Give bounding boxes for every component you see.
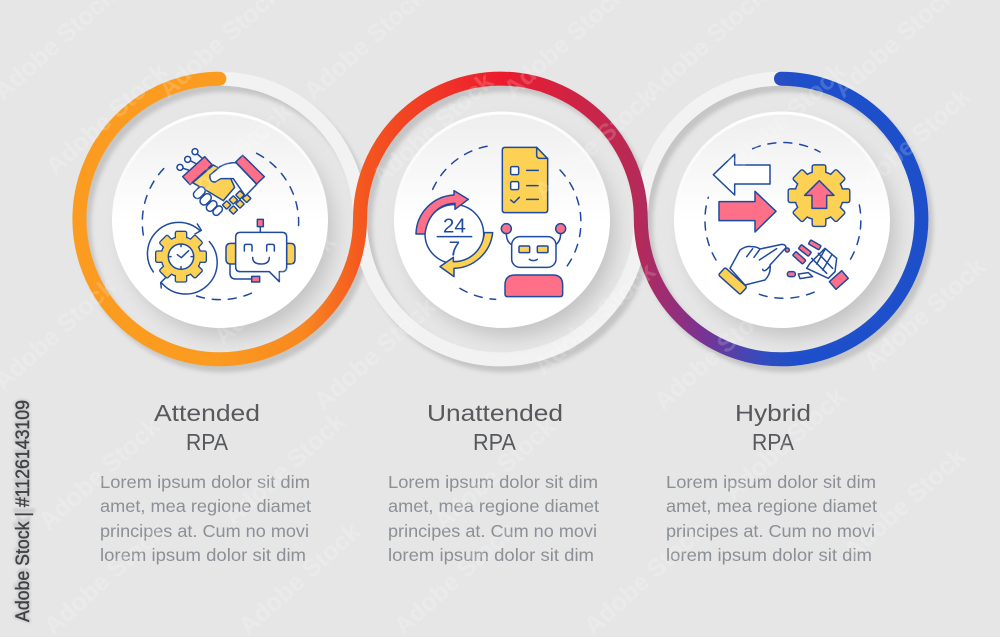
- watermarks: Adobe Stock: [839, 442, 971, 566]
- icon: 24/7 cycle: [416, 191, 493, 277]
- panel: unattended RPA disc: [394, 112, 610, 328]
- watermarks: Adobe Stock: [389, 517, 521, 637]
- watermarks: Adobe Stock: [529, 82, 661, 206]
- watermarks: Adobe Stock: [719, 382, 851, 506]
- heading: Hybrid RPA: [735, 400, 811, 455]
- ribbon shadow: [84, 85, 926, 365]
- dashed ring: [705, 143, 861, 298]
- heading: Attended RPA: RPA: [186, 429, 229, 455]
- gradient ribbon: [79, 79, 921, 359]
- text block: Attended RPA description: principes at. Cum no movi: [100, 521, 309, 541]
- icon group: unattended RPA: [416, 146, 581, 299]
- icon: robot hand: [787, 240, 848, 289]
- heading: Hybrid RPA: RPA: [752, 429, 795, 455]
- watermarks: Adobe Stock: [719, 57, 851, 181]
- text block: Unattended RPA description: [388, 472, 599, 565]
- heading: Unattended RPA: [427, 400, 563, 455]
- text block: Unattended RPA description: amet, mea regione diamet: [388, 496, 599, 516]
- watermarks: Adobe Stock: [309, 292, 441, 416]
- text block: Hybrid RPA description: amet, mea regione diamet: [666, 496, 877, 516]
- dashed ring: [433, 146, 581, 299]
- icon: gear with up arrow: [789, 166, 849, 226]
- icon: handshake: [177, 149, 264, 217]
- text block: Unattended RPA description: principes at. Cum no movi: [388, 521, 597, 541]
- heading: Attended RPA: Attended: [154, 400, 260, 426]
- heading: Unattended RPA: Unattended: [427, 400, 563, 426]
- watermarks: Adobe Stock: [219, 407, 351, 531]
- watermarks: Adobe Stock: [844, 82, 976, 206]
- icon: 24/7 cycle: 24: [443, 214, 466, 237]
- watermarks: Adobe Stock: [34, 412, 166, 536]
- watermarks: Adobe Stock: [165, 97, 297, 221]
- icon: gear with clock: [147, 222, 217, 294]
- panel: attended RPA disc: [112, 112, 328, 328]
- heading: Unattended RPA: RPA: [473, 429, 517, 455]
- text block: Attended RPA description: lorem ipsum dolor sit dim: [100, 545, 306, 565]
- disc shadows: [122, 125, 896, 337]
- text block: Hybrid RPA description: lorem ipsum dolor sit dim: [666, 545, 872, 565]
- dashed ring: [142, 153, 299, 300]
- watermarks: Adobe Stock: [367, 67, 499, 191]
- text block: Attended RPA description: [100, 472, 311, 565]
- text block: Unattended RPA description: Lorem ipsum dolor sit dim: [388, 472, 598, 492]
- text block: Unattended RPA description: lorem ipsum dolor sit dim: [388, 545, 594, 565]
- text block: Hybrid RPA description: principes at. Cum no movi: [666, 521, 875, 541]
- text block: Hybrid RPA description: Lorem ipsum dolor sit dim: [666, 472, 876, 492]
- heading: Attended RPA: [154, 400, 260, 455]
- watermarks: Adobe Stock: [529, 257, 661, 381]
- text block: Attended RPA description: amet, mea regione diamet: [100, 496, 311, 516]
- heading: Hybrid RPA: Hybrid: [735, 400, 811, 426]
- icon: human hand: [718, 244, 789, 295]
- icon: 24/7 cycle: 7: [449, 237, 460, 260]
- icon group: hybrid RPA: [705, 143, 861, 298]
- watermarks: Adobe Stock: [39, 517, 171, 637]
- text block: Hybrid RPA description: [666, 472, 877, 565]
- watermarks: Adobe Stock: [41, 57, 173, 181]
- icon group: attended RPA: [142, 149, 299, 300]
- icon: robot: [501, 224, 566, 297]
- panel: hybrid RPA disc: [674, 112, 890, 328]
- watermarks: Adobe Stock: [579, 517, 711, 637]
- icon: checklist document: [502, 147, 548, 213]
- stock id side label: Adobe Stock | #1126143109: [13, 400, 34, 622]
- light ribbon track: [219, 79, 781, 359]
- watermarks: Adobe Stock: [859, 252, 991, 376]
- icon: white left arrow: [713, 154, 770, 195]
- text block: Attended RPA description: Lorem ipsum dolor sit dim: [100, 472, 310, 492]
- icon: pink right arrow: [719, 191, 776, 232]
- watermarks: Adobe Stock: [429, 412, 561, 536]
- watermarks: Adobe Stock: [234, 517, 366, 637]
- icon: chatbot: [226, 219, 295, 282]
- watermarks: Adobe Stock: [649, 292, 781, 416]
- stock id side label: Adobe Stock | #1126143109: [13, 400, 34, 622]
- watermarks: Adobe Stock: [209, 227, 341, 351]
